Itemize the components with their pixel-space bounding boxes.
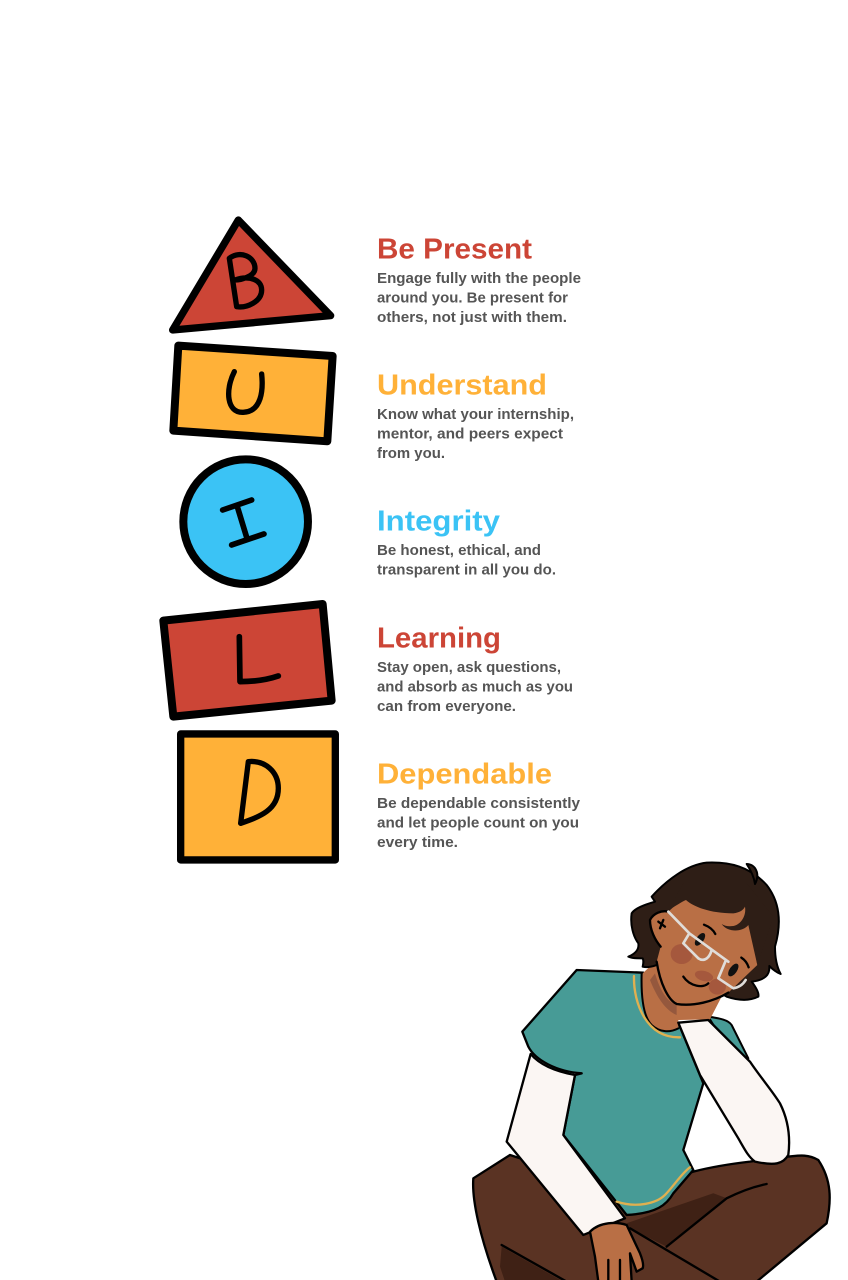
text block: Learning — [377, 622, 573, 715]
finger lines — [608, 1260, 620, 1280]
block: rectangle U — [173, 346, 333, 441]
neck shadow — [650, 973, 677, 1015]
text block: Integrity: transparent in all you do. — [377, 562, 556, 578]
text block: Learning: Stay open, ask questions, — [377, 659, 561, 676]
text block: Learning: Learning — [377, 622, 501, 654]
eye — [693, 931, 707, 947]
illustration: seated person leaning on hand — [473, 863, 830, 1280]
text block: Understand: Know what your internship, — [377, 406, 574, 423]
text block: Dependable — [377, 758, 581, 851]
fringe — [668, 883, 773, 965]
text block: Dependable: every time. — [377, 834, 458, 851]
text block: Integrity: Be honest, ethical, and — [377, 542, 541, 559]
text block: Understand: Understand — [377, 370, 547, 402]
text block: Learning: and absorb as much as you — [377, 678, 573, 696]
text block: Dependable: and let people count on you — [377, 814, 579, 832]
text block: Integrity — [377, 506, 556, 578]
text block: Understand — [377, 370, 574, 462]
block: circle I — [183, 459, 308, 584]
hair curl — [747, 864, 757, 884]
text block: Be Present — [377, 234, 581, 326]
text block: Integrity: Integrity — [377, 506, 500, 538]
neck outline — [642, 973, 678, 1031]
back hair — [628, 863, 781, 1000]
hand on knee — [590, 1223, 643, 1280]
block: rectangle L — [163, 604, 332, 717]
text block: Understand: mentor, and peers expect — [377, 426, 563, 442]
far shoulder of shirt — [708, 1017, 748, 1058]
text block: Be Present: Be Present — [377, 234, 532, 266]
text block: Learning: can from everyone. — [377, 698, 516, 715]
text block: Be Present: around you. Be present for — [377, 290, 568, 306]
eyes, brows, mouth and ear mark — [658, 920, 749, 986]
right white sleeve — [678, 1020, 789, 1164]
trouser shadows — [500, 1193, 727, 1280]
trouser fold lines — [502, 1184, 767, 1280]
block: square D — [181, 734, 335, 860]
left white sleeve — [507, 1054, 625, 1235]
text block: Be Present: others, not just with them. — [377, 309, 567, 326]
head — [628, 863, 781, 1005]
eye — [726, 962, 741, 978]
text block: Dependable: Be dependable consistently — [377, 795, 581, 812]
teal shirt — [522, 970, 703, 1215]
face — [650, 897, 757, 1005]
trousers — [473, 1155, 830, 1280]
collar trim — [634, 976, 680, 1037]
blocks column spelling BUILD — [163, 220, 335, 860]
shirt hem trim — [617, 1167, 690, 1205]
cheeks — [671, 944, 726, 995]
glasses — [668, 912, 746, 988]
body — [473, 960, 830, 1280]
neck — [642, 960, 723, 1031]
ear and jaw outline — [650, 911, 728, 1005]
block: triangle B — [173, 220, 331, 330]
text block: Understand: from you. — [377, 445, 445, 462]
text block: Dependable: Dependable — [377, 758, 552, 790]
text block: Be Present: Engage fully with the people — [377, 270, 581, 287]
